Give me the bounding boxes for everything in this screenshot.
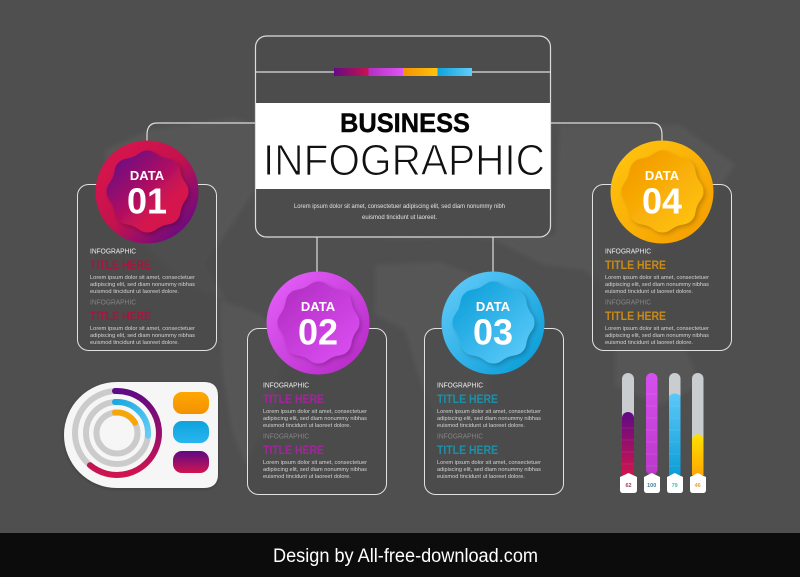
badge 03: 03 xyxy=(473,312,513,352)
badge 04 xyxy=(610,140,714,244)
badge 01: DATA xyxy=(130,168,165,183)
card text: adipiscing elit, sed diam nonummy nibhas xyxy=(605,282,709,288)
card text: Lorem ipsum dolor sit amet, consectetuer xyxy=(263,460,367,466)
footer band xyxy=(0,533,800,577)
card text: INFOGRAPHIC xyxy=(437,382,483,390)
card text: INFOGRAPHIC xyxy=(90,300,136,306)
panel: data 04 card xyxy=(592,140,732,350)
bar 46: 46 xyxy=(695,483,701,489)
card frame xyxy=(424,328,564,494)
panel: data 02 card xyxy=(248,272,386,494)
card text: euismod tincidunt ut laoreet dolore. xyxy=(437,423,525,429)
card text: Lorem ipsum dolor sit amet, consectetuer xyxy=(437,409,541,415)
card frame xyxy=(78,184,216,350)
card text: adipiscing elit, sed diam nonummy nibhas xyxy=(90,282,195,288)
card text: adipiscing elit, sed diam nonummy nibhas xyxy=(263,416,367,422)
badge 03 xyxy=(442,272,544,374)
card text: Lorem ipsum dolor sit amet, consectetuer xyxy=(263,409,367,415)
card text: adipiscing elit, sed diam nonummy nibhas xyxy=(437,467,541,473)
card text: Lorem ipsum dolor sit amet, consectetuer xyxy=(437,460,541,466)
card text xyxy=(263,382,367,480)
badge 02: 02 xyxy=(298,312,338,352)
card text: euismod tincidunt ut laoreet dolore. xyxy=(263,474,351,480)
card frame xyxy=(592,184,732,350)
inner arc xyxy=(115,412,135,423)
intro text xyxy=(294,204,505,221)
title band xyxy=(256,103,550,189)
footer credit: Design by All-free-download.com xyxy=(273,546,538,567)
card text: Lorem ipsum dolor sit amet, consectetuer xyxy=(605,275,709,281)
panel: data 01 card xyxy=(78,140,216,350)
card text: INFOGRAPHIC xyxy=(605,300,651,306)
main frame xyxy=(256,36,550,237)
card text: adipiscing elit, sed diam nonummy nibhas xyxy=(263,467,367,473)
card text: Lorem ipsum dolor sit amet, consectetuer xyxy=(605,326,709,332)
connector lines xyxy=(147,123,662,275)
card text: euismod tincidunt ut laoreet dolore. xyxy=(263,423,351,429)
card text: INFOGRAPHIC xyxy=(605,248,651,256)
card text: INFOGRAPHIC xyxy=(263,382,309,390)
badge 04: 04 xyxy=(642,180,682,222)
card text: adipiscing elit, sed diam nonummy nibhas xyxy=(437,416,541,422)
card text: Lorem ipsum dolor sit amet, consectetuer xyxy=(90,326,195,332)
title: infographic: INFOGRAPHIC xyxy=(263,136,545,185)
card text: Lorem ipsum dolor sit amet, consectetuer xyxy=(90,275,195,281)
card text xyxy=(90,248,195,346)
card text: adipiscing elit, sed diam nonummy nibhas xyxy=(90,333,195,339)
card text: TITLE HERE xyxy=(263,445,324,457)
card text: TITLE HERE xyxy=(90,311,151,323)
card frame xyxy=(248,328,386,494)
grey rings xyxy=(75,391,159,475)
legend pills xyxy=(173,392,209,473)
world map xyxy=(105,118,735,465)
card text: euismod tincidunt ut laoreet dolore. xyxy=(90,340,179,346)
card text: euismod tincidunt ut laoreet dolore. xyxy=(437,474,525,480)
panel: ring chart xyxy=(64,382,218,488)
card text xyxy=(437,382,541,480)
bar chart xyxy=(620,373,706,493)
intro text: euismod tincidunt ut laoreet. xyxy=(362,215,437,221)
card text: TITLE HERE xyxy=(437,394,498,406)
bar 62: 62 xyxy=(625,483,632,489)
card text xyxy=(605,248,709,346)
card text: INFOGRAPHIC xyxy=(437,434,483,440)
card text: euismod tincidunt ut laoreet dolore. xyxy=(605,289,693,295)
intro text: Lorem ipsum dolor sit amet, consectetuer adipiscing elit, sed diam nonummy nibh xyxy=(294,204,505,210)
card text: TITLE HERE xyxy=(605,260,666,272)
card text: euismod tincidunt ut laoreet dolore. xyxy=(90,289,179,295)
card text: TITLE HERE xyxy=(605,311,666,323)
middle arc xyxy=(115,402,148,436)
card text: INFOGRAPHIC xyxy=(263,434,309,440)
badge 01 xyxy=(96,140,198,244)
badge 02: DATA xyxy=(301,299,336,314)
bar 79: 79 xyxy=(672,483,678,489)
title: business: BUSINESS xyxy=(340,108,470,138)
badge 02 xyxy=(266,272,370,374)
panel: main title xyxy=(256,36,550,237)
card text: INFOGRAPHIC xyxy=(90,248,136,256)
badge 01: 01 xyxy=(127,180,167,222)
white panel xyxy=(64,382,218,488)
bar 100: 100 xyxy=(647,483,656,489)
outer arc xyxy=(90,391,159,475)
card text: TITLE HERE xyxy=(90,260,151,272)
colour bar xyxy=(334,68,472,76)
frame divider xyxy=(256,71,550,73)
card text: TITLE HERE xyxy=(437,445,498,457)
panel: data 03 card xyxy=(424,272,564,494)
card text: euismod tincidunt ut laoreet dolore. xyxy=(605,340,693,346)
card text: adipiscing elit, sed diam nonummy nibhas xyxy=(605,333,709,339)
card text: TITLE HERE xyxy=(263,394,324,406)
badge 03: DATA xyxy=(476,299,511,314)
badge 04: DATA xyxy=(645,168,680,183)
